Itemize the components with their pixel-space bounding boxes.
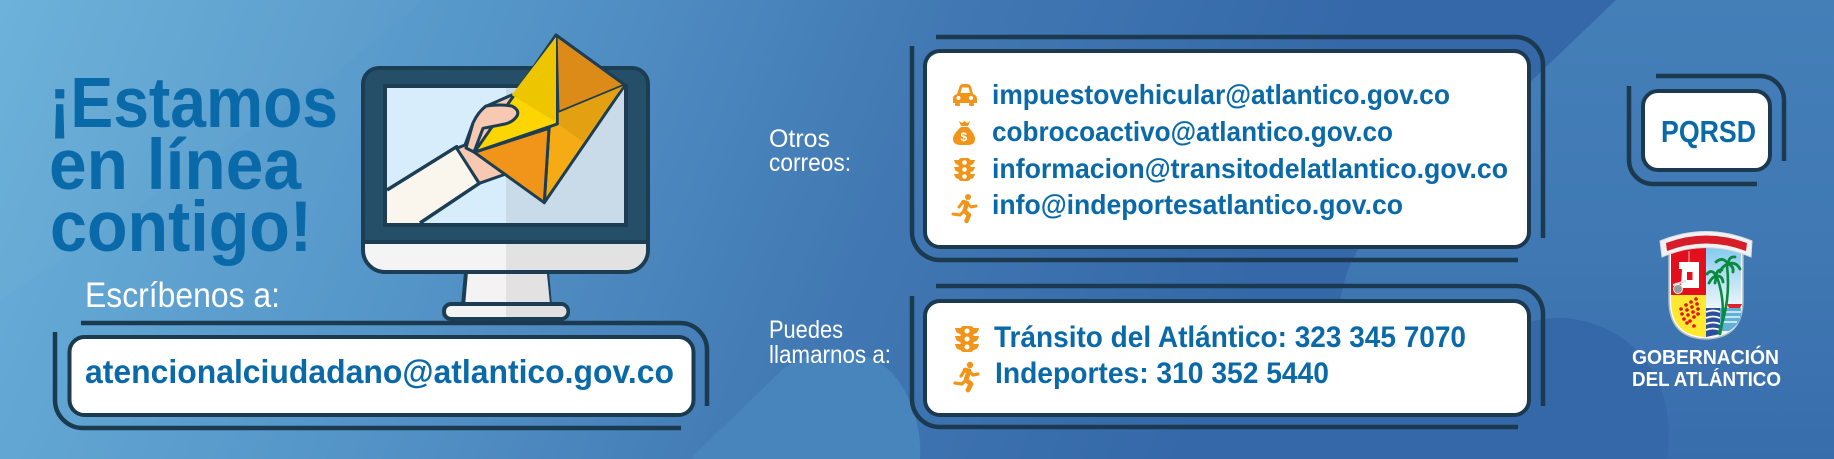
logo: wordmark: GOBERNACIÓN [1632,345,1779,369]
label: puedes llamarnos: Puedes [769,316,843,344]
panel: main email [55,323,707,428]
monitor body [363,68,648,272]
panel: phone numbers [912,286,1543,427]
main email address: atencionalciudadano@atlantico.gov.co [85,353,674,390]
hand [457,95,530,183]
heading: contigo! [50,188,312,267]
icon: runner [955,362,978,390]
illustration: monitor with envelope [363,35,648,319]
panel: other emails [912,37,1543,260]
logo: wordmark: DEL ATLÁNTICO [1632,368,1781,391]
envelope [474,35,625,203]
logo: wordmark [1632,345,1781,391]
phone: Tránsito: Tránsito del Atlántico: 323 345 7070 [994,321,1466,354]
button: PQRSD: PQRSD [1661,115,1756,149]
email list [992,79,1508,220]
button: PQRSD [1629,76,1784,184]
label: otros correos: Otros [769,125,830,153]
heading: en línea [49,126,301,205]
icon: traffic light [955,326,979,352]
email list: info@indeportesatlantico.gov.co [992,189,1403,220]
logo: coat of arms [1660,232,1752,339]
label: puedes llamarnos [769,316,891,369]
email list: informacion@transitodelatlantico.gov.co [992,153,1508,184]
icon: money bag: $ [960,130,968,144]
sleeve [387,147,479,223]
ribbon [1660,232,1752,257]
monitor stand [444,272,568,319]
icon: money bag [953,121,975,145]
fingers [466,105,518,152]
icon: runner [953,194,976,221]
icon: car [953,84,977,106]
label: Escríbenos a: Escríbenos a: [85,276,280,315]
icon: traffic light [954,158,975,181]
shield [1669,246,1743,339]
phone: Indeportes: Indeportes: 310 352 5440 [995,357,1329,390]
palms [1707,257,1740,334]
red fruit [1679,297,1700,328]
heading [49,64,338,267]
tower [1673,251,1699,294]
heading: ¡Estamos [49,64,338,143]
label: puedes llamarnos: llamarnos a: [769,341,891,369]
label: otros correos [769,125,851,177]
label: otros correos: correos: [769,149,851,177]
email list: impuestovehicular@atlantico.gov.co [992,79,1450,110]
email list: cobrocoactivo@atlantico.gov.co [992,116,1393,147]
